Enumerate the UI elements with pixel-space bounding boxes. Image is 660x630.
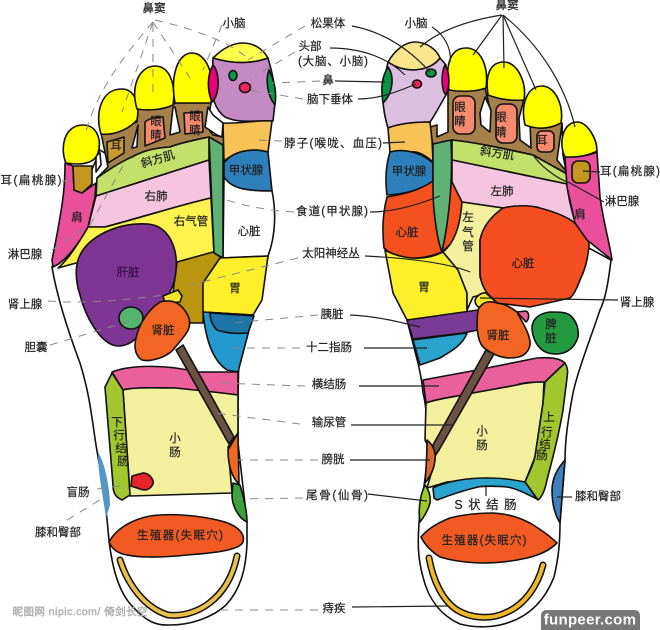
left foot organ labels: 肝脏: [116, 265, 140, 279]
dashed leader lines: [48, 20, 320, 610]
left pituitary dot: [240, 82, 250, 92]
centre and side labels: (大脑、小脑): [298, 54, 368, 68]
right shoulder: [565, 152, 612, 260]
left foot organ labels: 生殖器(失眠穴): [137, 528, 223, 542]
right stomach: [385, 250, 467, 320]
centre and side labels: 膀胱: [322, 452, 345, 466]
left foot organ labels: 小: [169, 432, 181, 445]
left eye box 1: [145, 117, 165, 146]
centre and side labels: 输尿管: [312, 415, 346, 429]
left toe 2: [135, 66, 174, 110]
left ureter: [176, 345, 234, 444]
left red appendix: [131, 473, 153, 490]
left magenta zone: [208, 65, 218, 102]
left little toe: [63, 125, 99, 164]
right sigmoid colon: [433, 478, 537, 500]
right head zone: [383, 58, 446, 128]
right foot organ labels: 耳: [536, 135, 548, 147]
centre and side labels: 尾骨(仙骨): [306, 489, 368, 502]
right foot organ labels: 睛: [495, 126, 507, 139]
left foot organ labels: 肠: [169, 446, 181, 459]
right pink spot: [517, 311, 529, 322]
right foot organ labels: 肠: [536, 449, 548, 462]
left olive area: [172, 252, 222, 323]
left foot organ labels: 肠: [117, 455, 129, 468]
right foot organ labels: 睛: [454, 115, 466, 128]
right transverse colon: [423, 358, 565, 403]
left foot organ labels: 下: [111, 417, 123, 429]
left haemorrhoid arc fill: [120, 556, 237, 615]
right coccyx: [419, 485, 430, 522]
left foot: [52, 43, 276, 625]
right foot organ labels: 眼: [495, 111, 507, 124]
right magenta zone: [442, 65, 449, 95]
right green nose zone: [382, 67, 392, 103]
left descending colon: [105, 373, 130, 500]
right heart small: [383, 181, 462, 258]
right trapezius: [452, 140, 567, 184]
right big toe: [448, 48, 487, 91]
centre and side labels: 淋巴腺: [8, 247, 43, 261]
right toe 2: [487, 62, 525, 100]
centre and side labels: 胆囊: [24, 340, 48, 354]
left foot organ labels: 斜方肌: [139, 147, 177, 171]
left toe 1: [174, 53, 212, 103]
left foot organ labels: 行: [113, 429, 125, 442]
right foot organ labels: 生殖器(失眠穴): [442, 533, 527, 547]
left head zone: [212, 58, 275, 121]
centre and side labels: 胰脏: [320, 307, 344, 321]
toe gaps: [96, 107, 223, 172]
left oesophagus: [209, 137, 223, 258]
right foot organ labels: 斜方肌: [479, 143, 516, 163]
right foot organ labels: 心脏: [512, 256, 534, 270]
watermark: 昵图网 nipic.com/ 倚剑长空: [12, 605, 148, 618]
centre and side labels: 耳(扁桃腺): [0, 173, 62, 187]
right foot organ labels: 小: [476, 425, 488, 438]
gall bladder: [119, 307, 143, 329]
right foot organ labels: 行: [541, 426, 553, 439]
right foot organ labels: 气: [462, 225, 474, 239]
centre and side labels: 食道(甲状腺): [296, 204, 368, 218]
left pineal dot: [229, 70, 237, 80]
right foot organ labels: 左肺: [490, 184, 514, 198]
liver: [76, 224, 176, 346]
left foot organ labels: 睛: [189, 124, 201, 137]
right foot organ labels: 肾脏: [486, 328, 510, 342]
left foot organ labels: 肾脏: [152, 323, 174, 337]
centre and side labels: 淋巴腺: [605, 194, 640, 208]
centre and side labels: 肾上腺: [620, 295, 655, 309]
right big toe cap: [388, 42, 440, 70]
left kidney: [135, 301, 190, 361]
right small intestine: [425, 382, 544, 488]
right foot organ labels: 胃: [418, 281, 430, 294]
right pineal dot: [426, 69, 436, 77]
left adrenal: [163, 290, 182, 303]
left foot outline: [52, 150, 268, 625]
left ear box: [107, 137, 124, 163]
left foot organ labels: 睛: [150, 129, 162, 142]
centre and side labels: 鼻窦: [496, 0, 518, 12]
left thyroid: [224, 150, 272, 191]
left foot organ labels: 耳: [110, 140, 122, 152]
left green nose zone: [267, 70, 276, 105]
left foot organ labels: 肩: [71, 210, 83, 224]
left small intestine: [123, 388, 238, 496]
right tonsil: [572, 161, 590, 183]
right reproductive zone: [421, 513, 557, 563]
right pancreas: [407, 310, 478, 339]
left reproductive zone: [109, 515, 243, 557]
left trachea: [58, 198, 214, 268]
right neck: [388, 122, 433, 162]
right thyroid: [386, 151, 433, 195]
left shoulder: [52, 163, 96, 267]
centre and side labels: 小脑: [222, 17, 246, 30]
left coccyx: [232, 483, 247, 522]
right eye box 1: [453, 96, 475, 134]
right adrenal: [475, 293, 497, 308]
centre and side labels: 十二指肠: [306, 340, 352, 354]
left foot organ labels: 结: [115, 442, 127, 455]
right foot outline: [407, 200, 611, 627]
right foot organ labels: 脾: [545, 317, 557, 331]
centre and side labels: 鼻窦: [142, 1, 166, 15]
centre and side labels: 耳(扁桃腺): [600, 164, 660, 178]
centre and side labels: 松果体: [311, 16, 346, 30]
brown toe base: [97, 103, 229, 178]
left big toe cap: [213, 43, 268, 63]
right ascending colon: [525, 363, 568, 500]
right foot organ labels: 肩: [574, 207, 586, 221]
right bladder: [425, 440, 435, 483]
right foot organ labels: 肠: [476, 439, 488, 452]
right toe gaps: [480, 97, 566, 171]
right foot: [382, 42, 612, 627]
right left-trachea: [443, 202, 503, 310]
left stomach: [203, 256, 268, 315]
left knee zone: [98, 452, 110, 518]
right foot organ labels: 左: [462, 210, 474, 224]
right foot organ labels: 眼: [454, 101, 466, 114]
left neck: [223, 121, 272, 161]
right brown toe base: [430, 88, 567, 174]
left tonsil: [73, 166, 92, 193]
right toe 4: [562, 122, 597, 157]
centre and side labels: 鼻: [322, 73, 334, 87]
solid leader lines: [330, 15, 618, 607]
left transverse colon: [112, 366, 238, 395]
left foot organ labels: 眼: [189, 110, 201, 123]
right eye box 2: [496, 104, 517, 143]
centre and side labels: 脑下垂体: [307, 92, 353, 106]
centre and side labels: 脖子(喉咙、血压): [284, 136, 382, 150]
right oesophagus: [433, 140, 452, 252]
right knee zone: [552, 460, 565, 523]
centre and side labels: 肾上腺: [8, 297, 43, 311]
right lung: [452, 160, 576, 225]
left foot organ labels: 心脏: [238, 224, 260, 238]
left heart: [223, 177, 275, 258]
centre and side labels: 膝和臀部: [35, 525, 81, 539]
left lung: [88, 160, 211, 227]
right foot organ labels: S 状 结 肠: [454, 498, 518, 512]
left foot organ labels: 眼: [150, 115, 162, 128]
right ear box: [537, 131, 554, 152]
right foot organ labels: 结: [539, 438, 551, 451]
left pancreas: [210, 313, 254, 333]
right kidney: [477, 302, 530, 358]
centre and side labels: 小脑: [404, 17, 428, 30]
right heart large: [480, 206, 589, 307]
left foot organ labels: [71, 110, 264, 542]
right foot organ labels: 管: [462, 239, 474, 253]
right foot organ labels: 脏: [545, 331, 557, 345]
right haemorrhoid arc: [429, 558, 543, 617]
centre and side labels: 膝和臀部: [575, 489, 621, 503]
left haemorrhoid arc: [120, 556, 237, 615]
right foot organ labels: 上: [543, 411, 555, 424]
centre and side labels: 盲肠: [66, 485, 90, 499]
right foot organ labels: [392, 101, 586, 547]
left duodenum: [203, 312, 253, 372]
left foot organ labels: 胃: [229, 282, 241, 295]
left toe 3: [99, 89, 138, 134]
spleen: [532, 312, 578, 354]
left trapezius: [96, 137, 209, 196]
right ureter: [433, 350, 494, 456]
centre and side labels: 横结肠: [312, 377, 346, 391]
right haemorrhoid arc fill: [429, 558, 543, 617]
right toe 3: [524, 86, 562, 128]
left foot organ labels: 右气管: [174, 214, 208, 228]
right foot organ labels: 甲状腺: [392, 164, 427, 178]
left foot organ labels: 右肺: [144, 189, 168, 203]
right duodenum: [413, 333, 467, 365]
funpeer badge: funpeer.com: [544, 612, 636, 628]
centre and side labels: 痔疾: [322, 601, 346, 615]
left eye box 2: [184, 112, 203, 134]
left foot organ labels: 甲状腺: [229, 163, 264, 177]
left bladder: [228, 433, 239, 484]
centre and side labels: 太阳神经丛: [302, 246, 360, 260]
right foot organ labels: 心脏: [396, 225, 418, 239]
centre and side labels: 头部: [298, 39, 322, 53]
right pituitary dot: [412, 80, 422, 88]
